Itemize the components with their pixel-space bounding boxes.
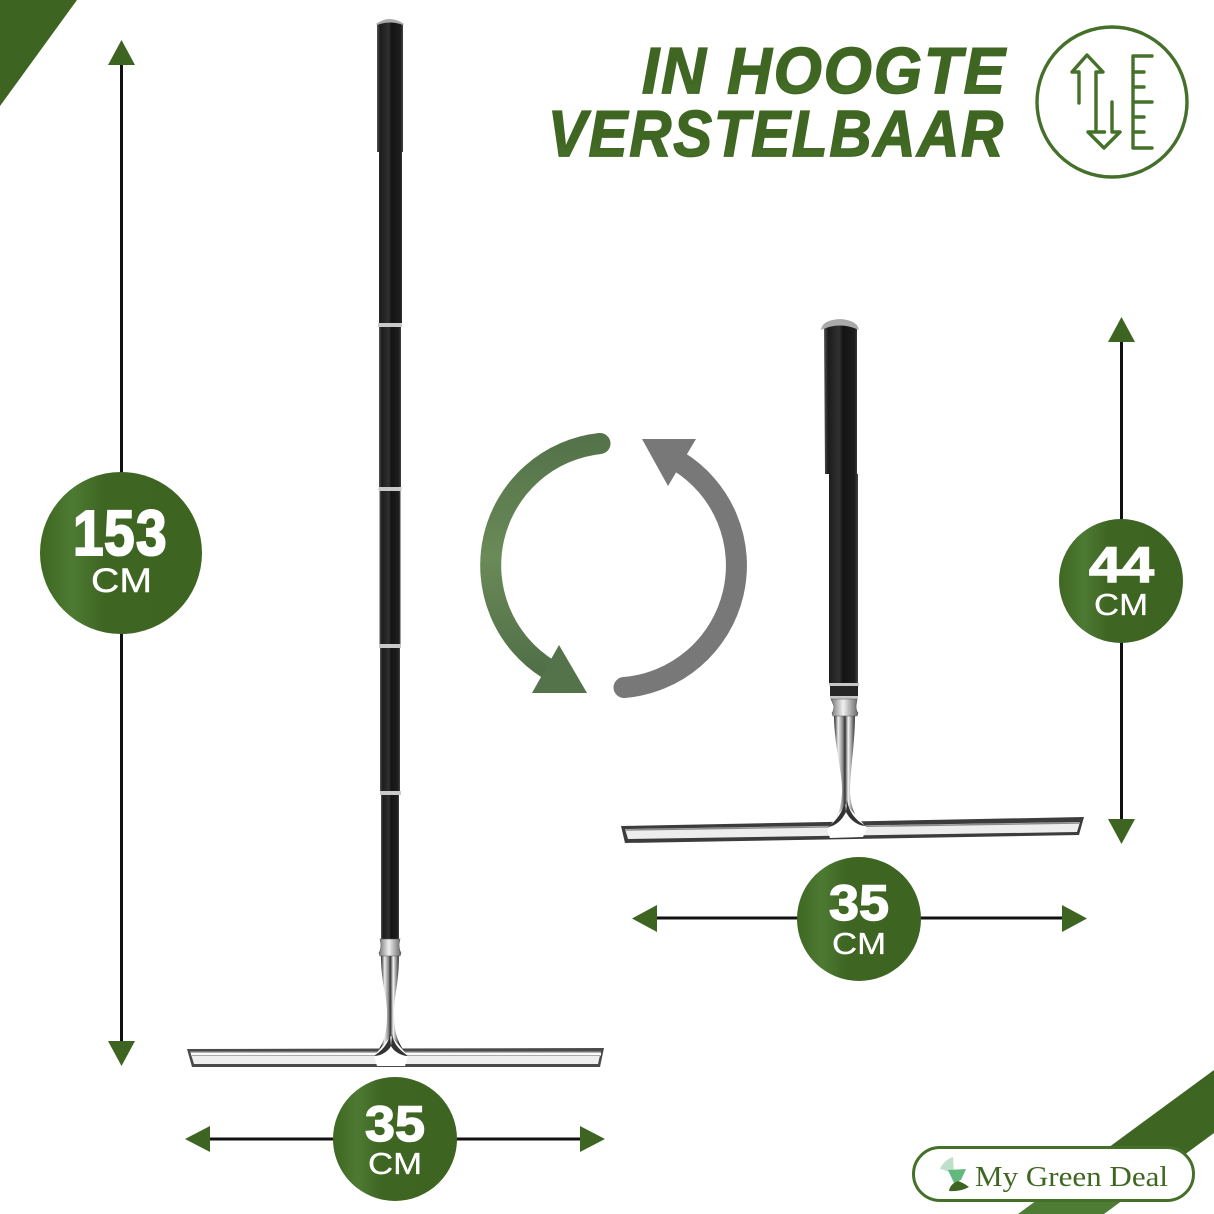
top cap xyxy=(376,19,404,25)
ferrule xyxy=(831,699,858,716)
badge: 44 cm xyxy=(1059,519,1183,643)
ferrule xyxy=(379,939,401,956)
title: VERSTELBAAR xyxy=(548,98,1005,171)
badge: 35 cm right: CM xyxy=(832,926,886,961)
green arrow xyxy=(491,444,600,693)
brand name: My Green Deal xyxy=(975,1162,1168,1193)
badge: 153 cm: CM xyxy=(91,562,152,600)
blade xyxy=(621,817,1084,843)
rings xyxy=(829,683,859,699)
neck xyxy=(827,714,867,830)
dimension arrow: 44 cm height xyxy=(1108,317,1135,844)
top cap xyxy=(821,319,859,330)
corner triangle top-left xyxy=(0,0,77,106)
tall squeegee xyxy=(187,19,604,1067)
cycle arrows xyxy=(491,439,736,693)
dimension arrow: 153 cm height xyxy=(108,40,135,1066)
neck xyxy=(373,954,409,1057)
icon: leaves xyxy=(940,1157,969,1191)
corner band bottom-right xyxy=(1018,1070,1214,1214)
rings xyxy=(378,323,402,795)
badge: 35 cm left: 35 xyxy=(365,1096,425,1152)
badge: 44 cm: 44 xyxy=(1089,537,1154,593)
badge: 44 cm: CM xyxy=(1094,587,1148,622)
badge: 35 cm right xyxy=(797,857,921,981)
pole segments xyxy=(377,22,403,939)
pole xyxy=(824,322,858,685)
dimension arrow: 35 cm right width xyxy=(632,905,1087,932)
title xyxy=(548,35,1007,171)
grey arrow xyxy=(624,439,736,688)
badge: 153 cm xyxy=(40,472,202,634)
badge: 35 cm right: 35 xyxy=(829,875,889,931)
badge: 153 cm: 153 xyxy=(73,497,167,569)
short squeegee xyxy=(621,319,1084,843)
badge: 35 cm left xyxy=(333,1077,457,1201)
icon: height adjustment xyxy=(1037,27,1187,177)
title: IN HOOGTE xyxy=(642,35,1007,108)
blade xyxy=(187,1048,604,1067)
logo: My Green Deal xyxy=(914,1148,1194,1200)
dimension arrow: 35 cm left width xyxy=(185,1126,605,1152)
badge: 35 cm left: CM xyxy=(368,1146,422,1181)
